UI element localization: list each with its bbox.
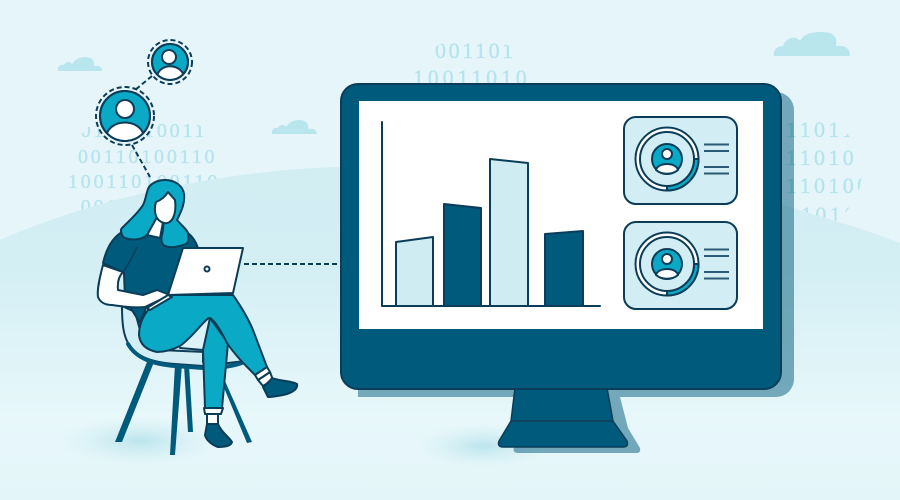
sock bottom (207, 414, 218, 424)
back leg (203, 318, 228, 408)
avatar small (148, 40, 192, 84)
binary digits left: 00110010011 (68, 120, 207, 142)
ground shadow under monitor stand (418, 424, 548, 468)
neck (147, 217, 163, 238)
progress ring (636, 128, 698, 190)
monitor drop shadow (358, 92, 794, 453)
cloud right (774, 32, 850, 56)
bar 4 (545, 231, 583, 306)
bar 1 (396, 237, 433, 306)
cuff bottom (204, 408, 223, 414)
bar 2 (444, 204, 481, 306)
dashed connector laptop to monitor (244, 263, 345, 265)
binary digits left (70, 124, 216, 210)
foot bottom (205, 424, 232, 447)
ground shadow under chair (60, 417, 220, 465)
binary digits right: 11010 (786, 145, 857, 170)
monitor stand (498, 388, 628, 447)
chart axes (382, 122, 600, 306)
binary digits right: 11011 (786, 117, 856, 142)
monitor body (341, 84, 781, 389)
face (155, 192, 175, 223)
monitor screen (359, 101, 763, 329)
binary digits right: 1010 (801, 202, 859, 227)
chair seat (122, 306, 245, 366)
cloud middle (272, 120, 317, 134)
bar chart (382, 122, 600, 306)
lower pant seam (180, 348, 203, 362)
laptop keyboard base (147, 295, 172, 310)
binary digits top (415, 43, 526, 83)
chair seat underside band (128, 344, 244, 368)
avatar (652, 144, 682, 174)
avatar (652, 249, 682, 279)
binary digits top: 10011010 (413, 65, 531, 90)
foot right (263, 378, 297, 397)
binary digits left: 100110100110 (68, 171, 220, 193)
monitor (341, 84, 781, 447)
sock right (258, 372, 273, 386)
card text lines (704, 250, 729, 278)
cuff right (255, 367, 270, 380)
binary digits left: 100110100110 (68, 196, 220, 218)
profile card bottom (624, 222, 737, 309)
hill (0, 164, 900, 500)
dashed connector avatar to person (132, 145, 150, 177)
card text lines (704, 144, 729, 174)
binary digits left: 00110100110 (78, 146, 217, 168)
binary digits right: 110100 (786, 173, 872, 198)
sleeve seam (123, 247, 137, 272)
bar 3 (490, 159, 528, 306)
binary digits right (788, 122, 862, 221)
hair (121, 180, 188, 247)
front leg (139, 295, 267, 375)
arm (98, 265, 170, 307)
laptop logo (204, 266, 210, 272)
progress ring (636, 232, 698, 296)
avatar large (96, 87, 154, 145)
laptop (168, 248, 243, 295)
chair legs (115, 362, 252, 455)
dashed connector between avatars (135, 76, 152, 90)
cloud left (58, 57, 102, 71)
shirt (103, 232, 198, 323)
person on chair (98, 180, 297, 455)
binary digits top: 001101 (435, 38, 516, 63)
profile card top (624, 117, 737, 204)
